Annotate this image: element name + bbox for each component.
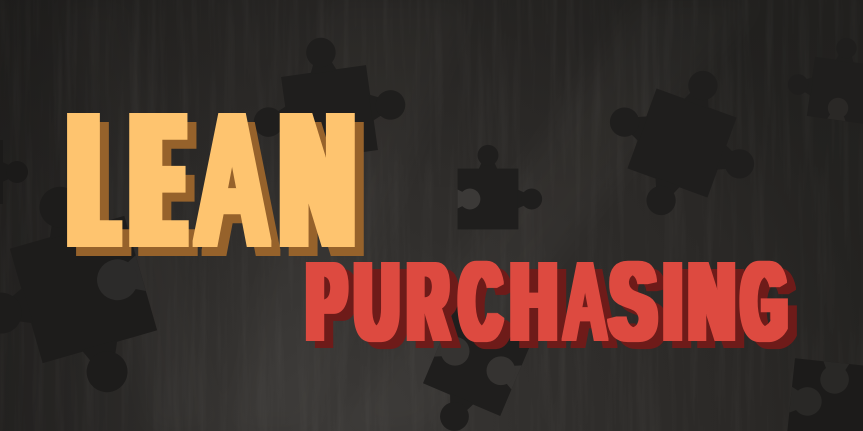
- subtitle: PURCHASING: R: [417, 246, 457, 371]
- subtitle: PURCHASING: N: [689, 239, 734, 364]
- puzzle piece: top right corner: [784, 31, 863, 127]
- subtitle: PURCHASING: P: [316, 246, 355, 371]
- title: LEAN: E: [137, 77, 179, 284]
- title: LEAN: L: [75, 77, 112, 284]
- subtitle: PURCHASING: I: [673, 246, 690, 371]
- subtitle: PURCHASING: N: [698, 246, 743, 371]
- subtitle: PURCHASING: G: [751, 246, 796, 371]
- subtitle: PURCHASING: R: [408, 239, 448, 364]
- puzzle piece: centre small: [458, 145, 542, 229]
- subtitle: PURCHASING: A: [572, 246, 616, 371]
- subtitle: PURCHASING: [306, 239, 797, 371]
- subtitle: PURCHASING: C: [460, 239, 501, 364]
- title: LEAN: A: [204, 86, 278, 293]
- subtitle: PURCHASING: C: [469, 246, 510, 371]
- title: LEAN: [67, 77, 364, 293]
- puzzle piece: bottom centre: [410, 306, 533, 431]
- puzzle piece: top centre: [243, 27, 411, 167]
- subtitle: PURCHASING: A: [563, 239, 607, 364]
- puzzle piece: bottom right: [787, 358, 863, 431]
- puzzle piece: left edge: [0, 140, 28, 204]
- subtitle: PURCHASING: P: [307, 239, 346, 364]
- title: LEAN: E: [146, 86, 188, 293]
- subtitle: PURCHASING: H: [520, 246, 565, 371]
- title: LEAN: N: [290, 86, 363, 293]
- subtitle: PURCHASING: U: [355, 239, 399, 364]
- puzzle piece: top right large: [585, 46, 779, 240]
- subtitle: PURCHASING: S: [619, 246, 665, 371]
- subtitle: PURCHASING: G: [742, 239, 787, 364]
- title: LEAN: N: [281, 77, 354, 284]
- title: LEAN: A: [195, 77, 269, 284]
- subtitle: PURCHASING: S: [610, 239, 656, 364]
- title: LEAN: L: [84, 86, 121, 293]
- subtitle: PURCHASING: I: [664, 239, 681, 364]
- subtitle: PURCHASING: U: [364, 246, 408, 371]
- puzzle piece: left large: [0, 171, 170, 421]
- subtitle: PURCHASING: H: [511, 239, 556, 364]
